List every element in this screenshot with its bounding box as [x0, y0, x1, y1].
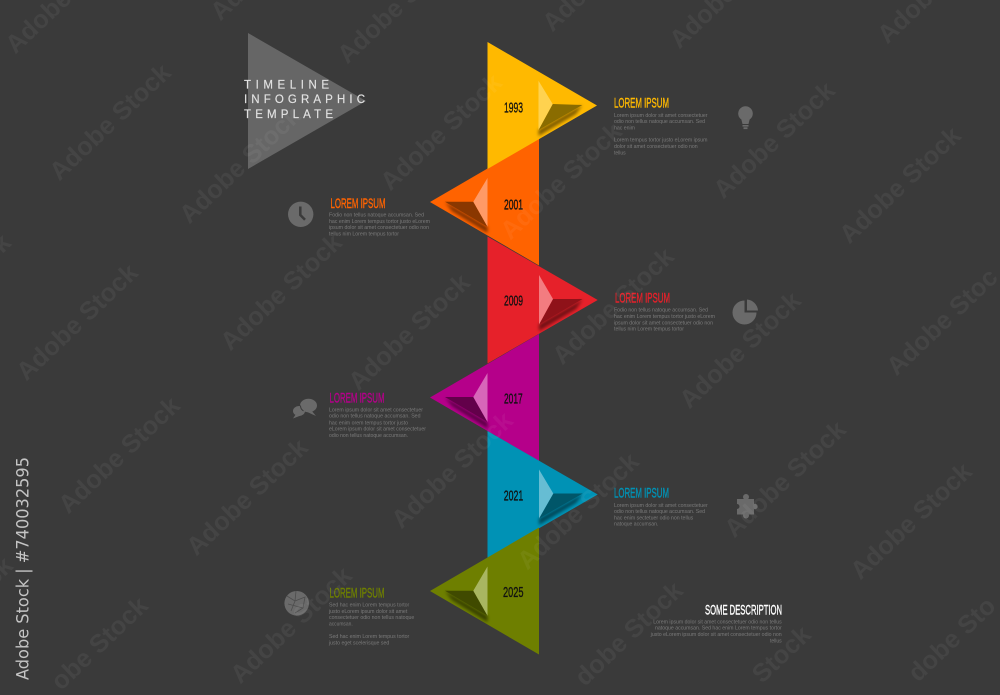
- text block 2001: Fodio non tellus natoque accumsan. Sed: [329, 212, 424, 218]
- text block 2017: Lorem ipsum dolor sit amet consectetuer: [329, 408, 423, 414]
- some description block: SOME DESCRIPTION: [705, 601, 782, 617]
- text block 2001: [329, 195, 430, 238]
- text block 2017: odio non tellus natoque accumsan. Sed: [329, 414, 421, 420]
- text block 1993: dolor sit amet consectetuer odio non: [614, 144, 698, 150]
- step 2001 orange triangle: [430, 138, 539, 266]
- text block 1993: tellus: [614, 150, 626, 156]
- icon: pie chart: [732, 300, 758, 324]
- icon: puzzle piece: [734, 494, 758, 518]
- text block 1993: odio non tellus natoque accumsan. Sed: [614, 119, 705, 125]
- text block 2009: [614, 289, 715, 332]
- text block 2025: accumsan.: [329, 621, 353, 627]
- text block 2009: tellus nim Lorem tempus tortor: [614, 326, 684, 332]
- watermark pattern: Adobe Stock: [343, 268, 476, 396]
- watermark pattern: dobe Stock: [570, 576, 689, 691]
- title text: INFOGRAPHIC: [244, 94, 365, 106]
- watermark pattern: Adobe Stock: [181, 433, 314, 561]
- text block 2017: eLorem ipsum dolor sit amet consectetuer: [329, 426, 426, 432]
- text block 2021: natoque accumsan.: [614, 521, 658, 527]
- some description block: natoque accumsan. Sed hac enim Lorem tempus tortor: [655, 626, 782, 632]
- icon: globe: [284, 591, 309, 616]
- watermark pattern: Adobe Stock: [44, 58, 177, 186]
- title triangle and heading: [244, 33, 366, 169]
- watermark pattern: Adobe Stock: [386, 406, 519, 534]
- watermark pattern: dobe Sto: [903, 592, 1000, 687]
- step 2017 magenta triangle: [430, 334, 539, 461]
- step 2009 red triangle: 2009: [504, 292, 523, 310]
- text block 2021: odio non tellus natoque accumsan. Sed: [614, 509, 705, 515]
- text block 1993: Lorem ipsum dolor sit amet consectetuer: [614, 113, 708, 119]
- text block 2025: justo eget scelerisque sed: [328, 640, 389, 646]
- text block 1993: hac enim: [614, 125, 635, 131]
- watermark pattern: Adobe Stock: [547, 242, 680, 370]
- watermark pattern: Adobe Stoc: [881, 263, 1000, 381]
- watermark pattern: Adobe Stock: [674, 286, 807, 414]
- some description block: tellus: [770, 638, 782, 644]
- watermark pattern: Adobe Stock: [215, 228, 348, 356]
- watermark pattern: Adobe Stock: [11, 258, 144, 386]
- text block 1993: LOREM IPSUM: [614, 94, 669, 110]
- text block 2017: [329, 389, 426, 439]
- step 2001 orange triangle: 2001: [504, 196, 523, 213]
- step 2017 magenta triangle: 2017: [504, 390, 523, 407]
- watermark pattern: Adobe Stock: [375, 68, 508, 196]
- text block 2025: Sed hac enim Lorem tempus tortor: [329, 603, 410, 609]
- title text: TEMPLATE: [244, 109, 333, 121]
- text block 2021: Lorem ipsum dolor sit amet consectetuer: [614, 503, 708, 509]
- stock id caption: Adobe Stock | #740032595: [14, 457, 32, 680]
- watermark pattern: Adobe Stock: [719, 415, 852, 543]
- text block 2001: ipsum dolor sit amet consectetuer odio non: [329, 225, 429, 231]
- text block 2017: odio non tellus natoque accumsan.: [329, 433, 408, 439]
- text block 2001: LOREM IPSUM: [330, 195, 386, 211]
- text block 2009: LOREM IPSUM: [615, 289, 670, 305]
- some description block: justo eLorem ipsum dolor sit amet consectetuer odio non: [650, 632, 782, 638]
- text block 2025: LOREM IPSUM: [330, 585, 384, 601]
- title text: [244, 80, 365, 121]
- step 1993 yellow triangle: 1993: [504, 100, 523, 116]
- icon: clock: [288, 202, 313, 227]
- title text: TIMELINE: [244, 80, 329, 92]
- text block 2009: Fodio non tellus natoque accumsan. Sed: [614, 308, 708, 314]
- icon: light bulb: [738, 106, 753, 129]
- icon: speech bubbles: [293, 399, 317, 418]
- text block 2009: hac enim Lorem tempus tortor justo eLorem: [614, 314, 715, 320]
- text block 2017: LOREM IPSUM: [330, 389, 384, 405]
- some description block: Lorem ipsum dolor sit amet consectetuer odio non tellus: [653, 619, 782, 625]
- text block 2025: Sed hac enim Lorem tempus tortor: [329, 634, 410, 640]
- some description block: [650, 601, 782, 644]
- text block 1993: Lorem tempus tortor justo eLorem ipsum: [614, 138, 708, 144]
- text block 2001: tellus nim Lorem tempus tortor: [329, 232, 399, 238]
- step 1993 yellow triangle: [488, 42, 597, 169]
- text block 2025: [328, 585, 414, 646]
- watermark pattern: Adobe Stock: [225, 561, 358, 689]
- watermark pattern: Adobe Stock: [512, 447, 645, 575]
- watermark pattern: obe Stock: [46, 591, 154, 695]
- watermark pattern: Adobe Stock: [708, 76, 841, 204]
- text block 2001: hac enim Lorem tempus tortor justo eLorem: [329, 219, 430, 225]
- text block 2021: LOREM IPSUM: [614, 484, 669, 500]
- step 2025 olive triangle: 2025: [503, 584, 524, 601]
- text block 2025: justo eLorem ipsum dolor sit amet: [328, 609, 408, 615]
- step 2009 red triangle: [488, 236, 598, 364]
- step 2025 olive triangle: [430, 528, 539, 654]
- text block 1993: [614, 94, 708, 156]
- text block 2009: ipsum dolor sit amet consectetuer odio non: [614, 320, 713, 326]
- text block 2025: consectetuer odio non tellus natoque: [329, 615, 414, 621]
- watermark pattern: Adobe Stock: [834, 121, 967, 249]
- text block 2017: hac enim orem tempus tortor justo: [329, 420, 408, 426]
- watermark pattern: Adobe Stock: [495, 117, 628, 245]
- step 2021 teal triangle: [488, 431, 598, 558]
- text block 2021: [614, 484, 708, 527]
- watermark pattern: Adobe Stock: [53, 391, 186, 519]
- watermark pattern: Adobe Stock: [174, 101, 307, 229]
- text block 2021: hac enim sectetuer odio non tellus: [614, 515, 694, 521]
- step 2021 teal triangle: 2021: [504, 488, 523, 504]
- watermark pattern: Adobe Stock: [845, 457, 978, 585]
- watermark pattern: Stock: [747, 620, 817, 689]
